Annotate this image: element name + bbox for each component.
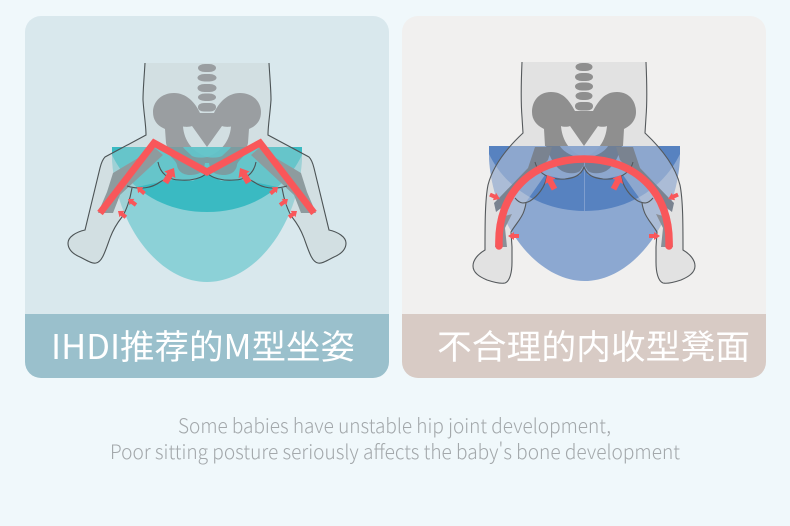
thigh and hip overlay inside seat xyxy=(491,146,678,232)
femur bones xyxy=(494,147,674,247)
description text: Poor sitting posture seriously affects the baby's bone development xyxy=(110,436,680,465)
spine vertebrae xyxy=(575,63,593,110)
pelvis bones xyxy=(532,92,636,162)
description text: Some babies have unstable hip joint development, xyxy=(178,410,611,439)
panel background xyxy=(25,16,389,314)
pressure arrows xyxy=(116,165,299,220)
thigh and hip overlay inside seat xyxy=(112,147,302,212)
body outlines xyxy=(68,63,346,263)
spine vertebrae xyxy=(198,64,216,112)
M-shaped seat bowl xyxy=(112,147,302,282)
panel background xyxy=(402,16,766,314)
caption band xyxy=(25,314,389,378)
red M-shaped line xyxy=(100,143,314,213)
caption text: 不合理的内收型凳面 xyxy=(437,320,750,369)
lower pelvis under seat xyxy=(546,146,622,173)
panel: unreasonable inward seat xyxy=(402,16,766,378)
lower pelvis under seat xyxy=(165,147,249,175)
light seat fold line xyxy=(584,146,586,211)
pressure arrows xyxy=(488,172,680,240)
diagram: baby hips on inward seat xyxy=(473,62,695,283)
description text xyxy=(110,410,680,465)
baby body silhouette xyxy=(473,62,695,283)
body outlines xyxy=(473,62,695,283)
inward seat bowl xyxy=(489,146,680,281)
seat inner surface xyxy=(489,146,680,211)
pelvis bones xyxy=(153,93,261,162)
red arch line xyxy=(499,159,669,246)
baby body silhouette xyxy=(68,63,346,263)
caption text: IHDI推荐的M型坐姿 xyxy=(51,320,355,369)
caption band xyxy=(402,314,766,378)
seat inner surface xyxy=(112,147,302,212)
diagram: baby hips on M-shaped seat xyxy=(68,63,346,282)
femur bones xyxy=(98,148,316,213)
panel: recommended M-shape posture xyxy=(25,16,389,378)
